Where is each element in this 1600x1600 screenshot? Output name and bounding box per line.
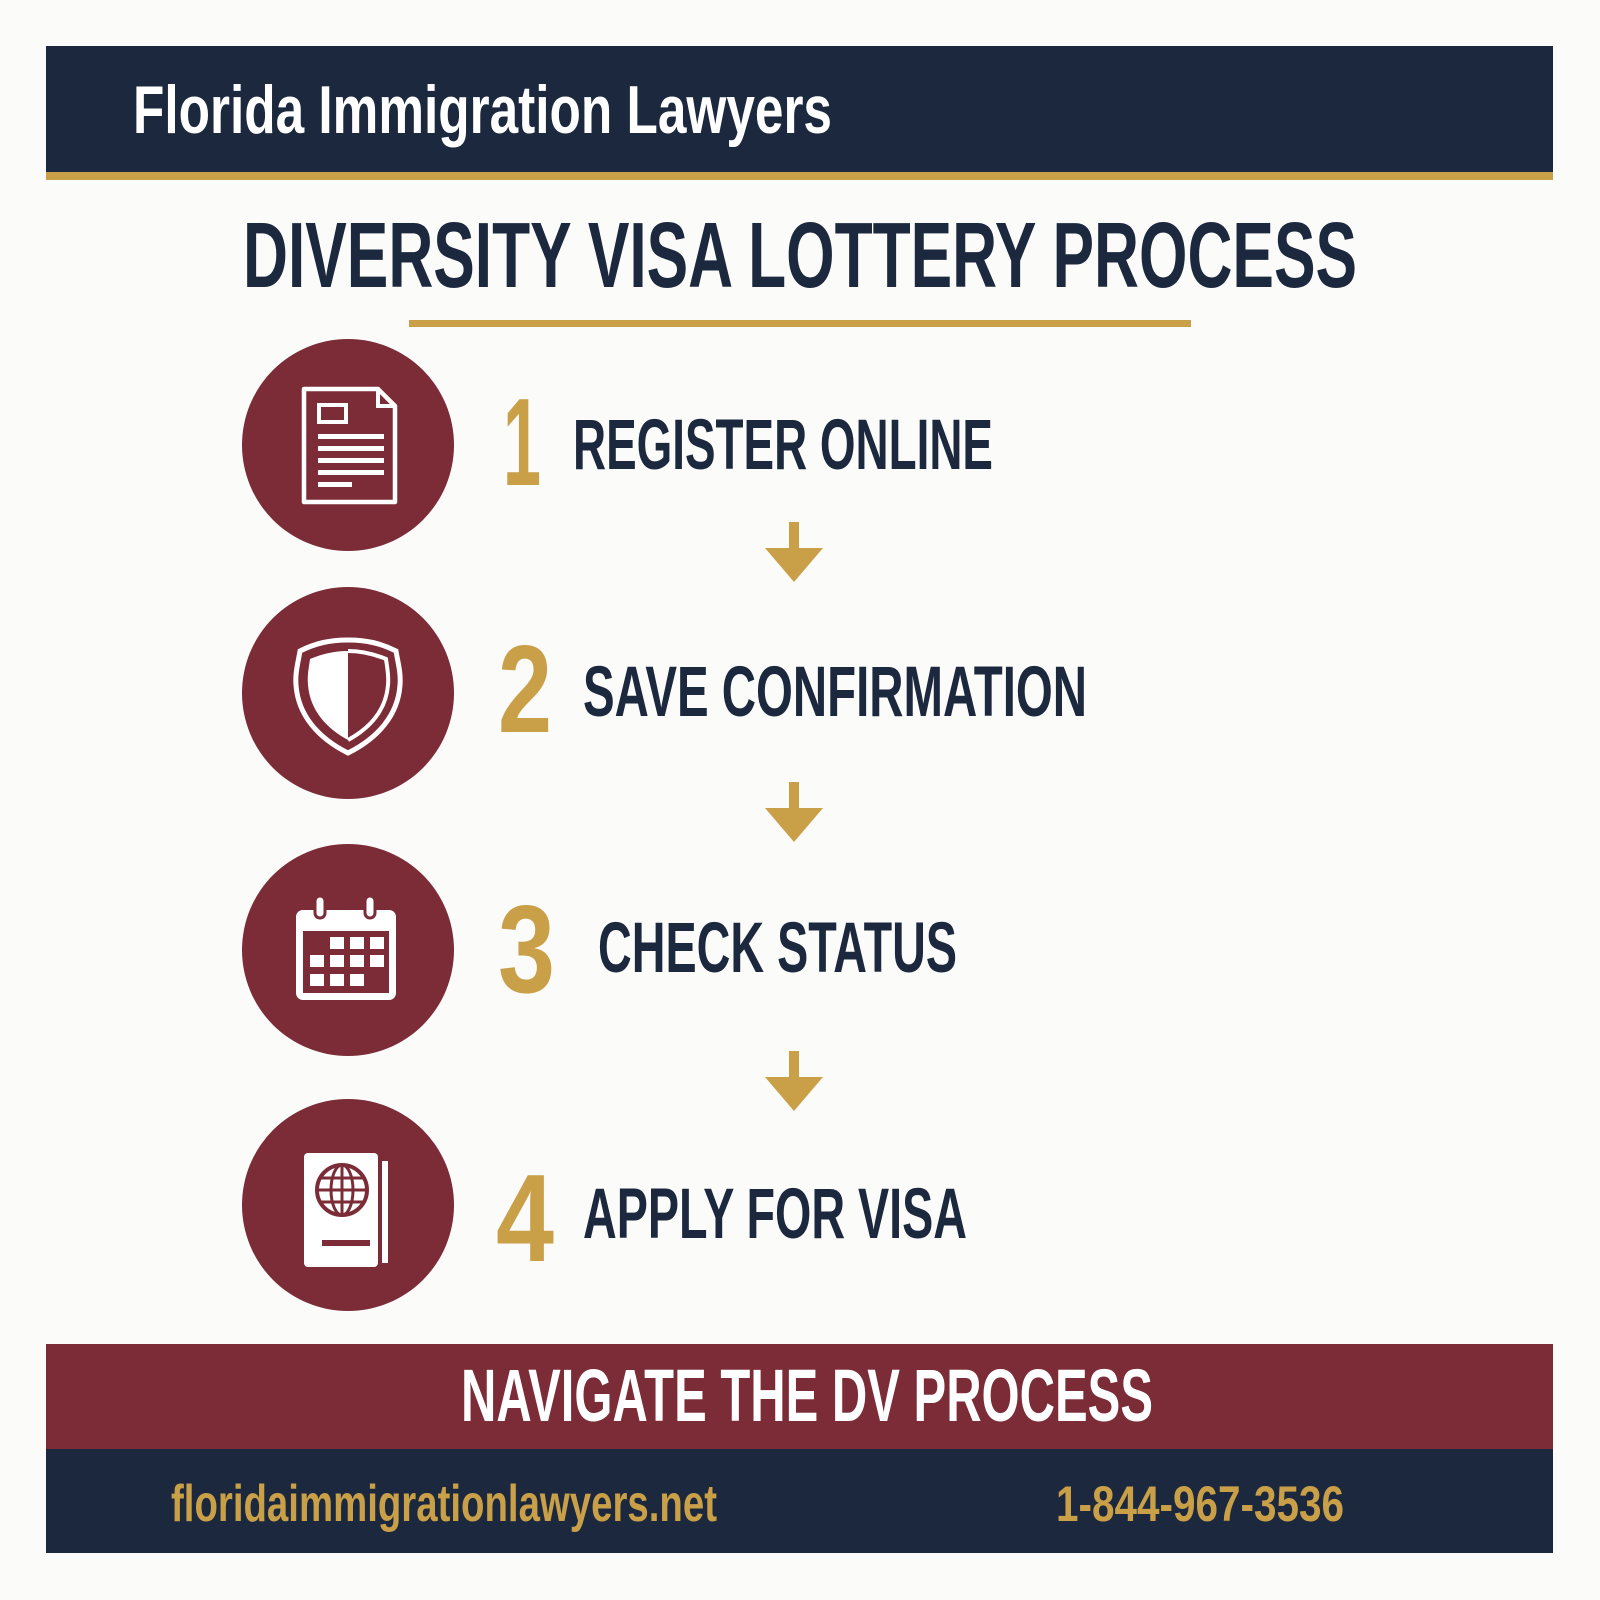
header bar (46, 46, 1553, 180)
step 4 (242, 1099, 967, 1311)
step number 2: 2 (498, 621, 552, 759)
icon: calendar (242, 844, 454, 1056)
footer contact bar (46, 1449, 1553, 1553)
step label 1: REGISTER ONLINE (573, 406, 993, 485)
step 1 (242, 339, 993, 551)
title underline (409, 320, 1191, 327)
step number 3: 3 (498, 881, 555, 1019)
step label 4: APPLY FOR VISA (583, 1175, 967, 1254)
step label 2: SAVE CONFIRMATION (583, 653, 1087, 732)
step number 4: 4 (496, 1150, 554, 1288)
header title text: Florida Immigration Lawyers (133, 72, 832, 148)
icon: passport (242, 1099, 454, 1311)
phone: 1-844-967-3536 (1056, 1476, 1344, 1532)
step 3 (242, 844, 957, 1056)
icon: document (242, 339, 454, 551)
arrow 1 (765, 522, 823, 582)
step number 1: 1 (503, 374, 541, 512)
CTA text: NAVIGATE THE DV PROCESS (461, 1354, 1153, 1437)
step label 3: CHECK STATUS (598, 909, 957, 988)
step 2 (242, 587, 1087, 799)
call to action band (46, 1344, 1553, 1449)
arrow 3 (765, 1051, 823, 1111)
icon: shield (242, 587, 454, 799)
website: floridaimmigrationlawyers.net (171, 1475, 717, 1533)
arrow 2 (765, 782, 823, 842)
